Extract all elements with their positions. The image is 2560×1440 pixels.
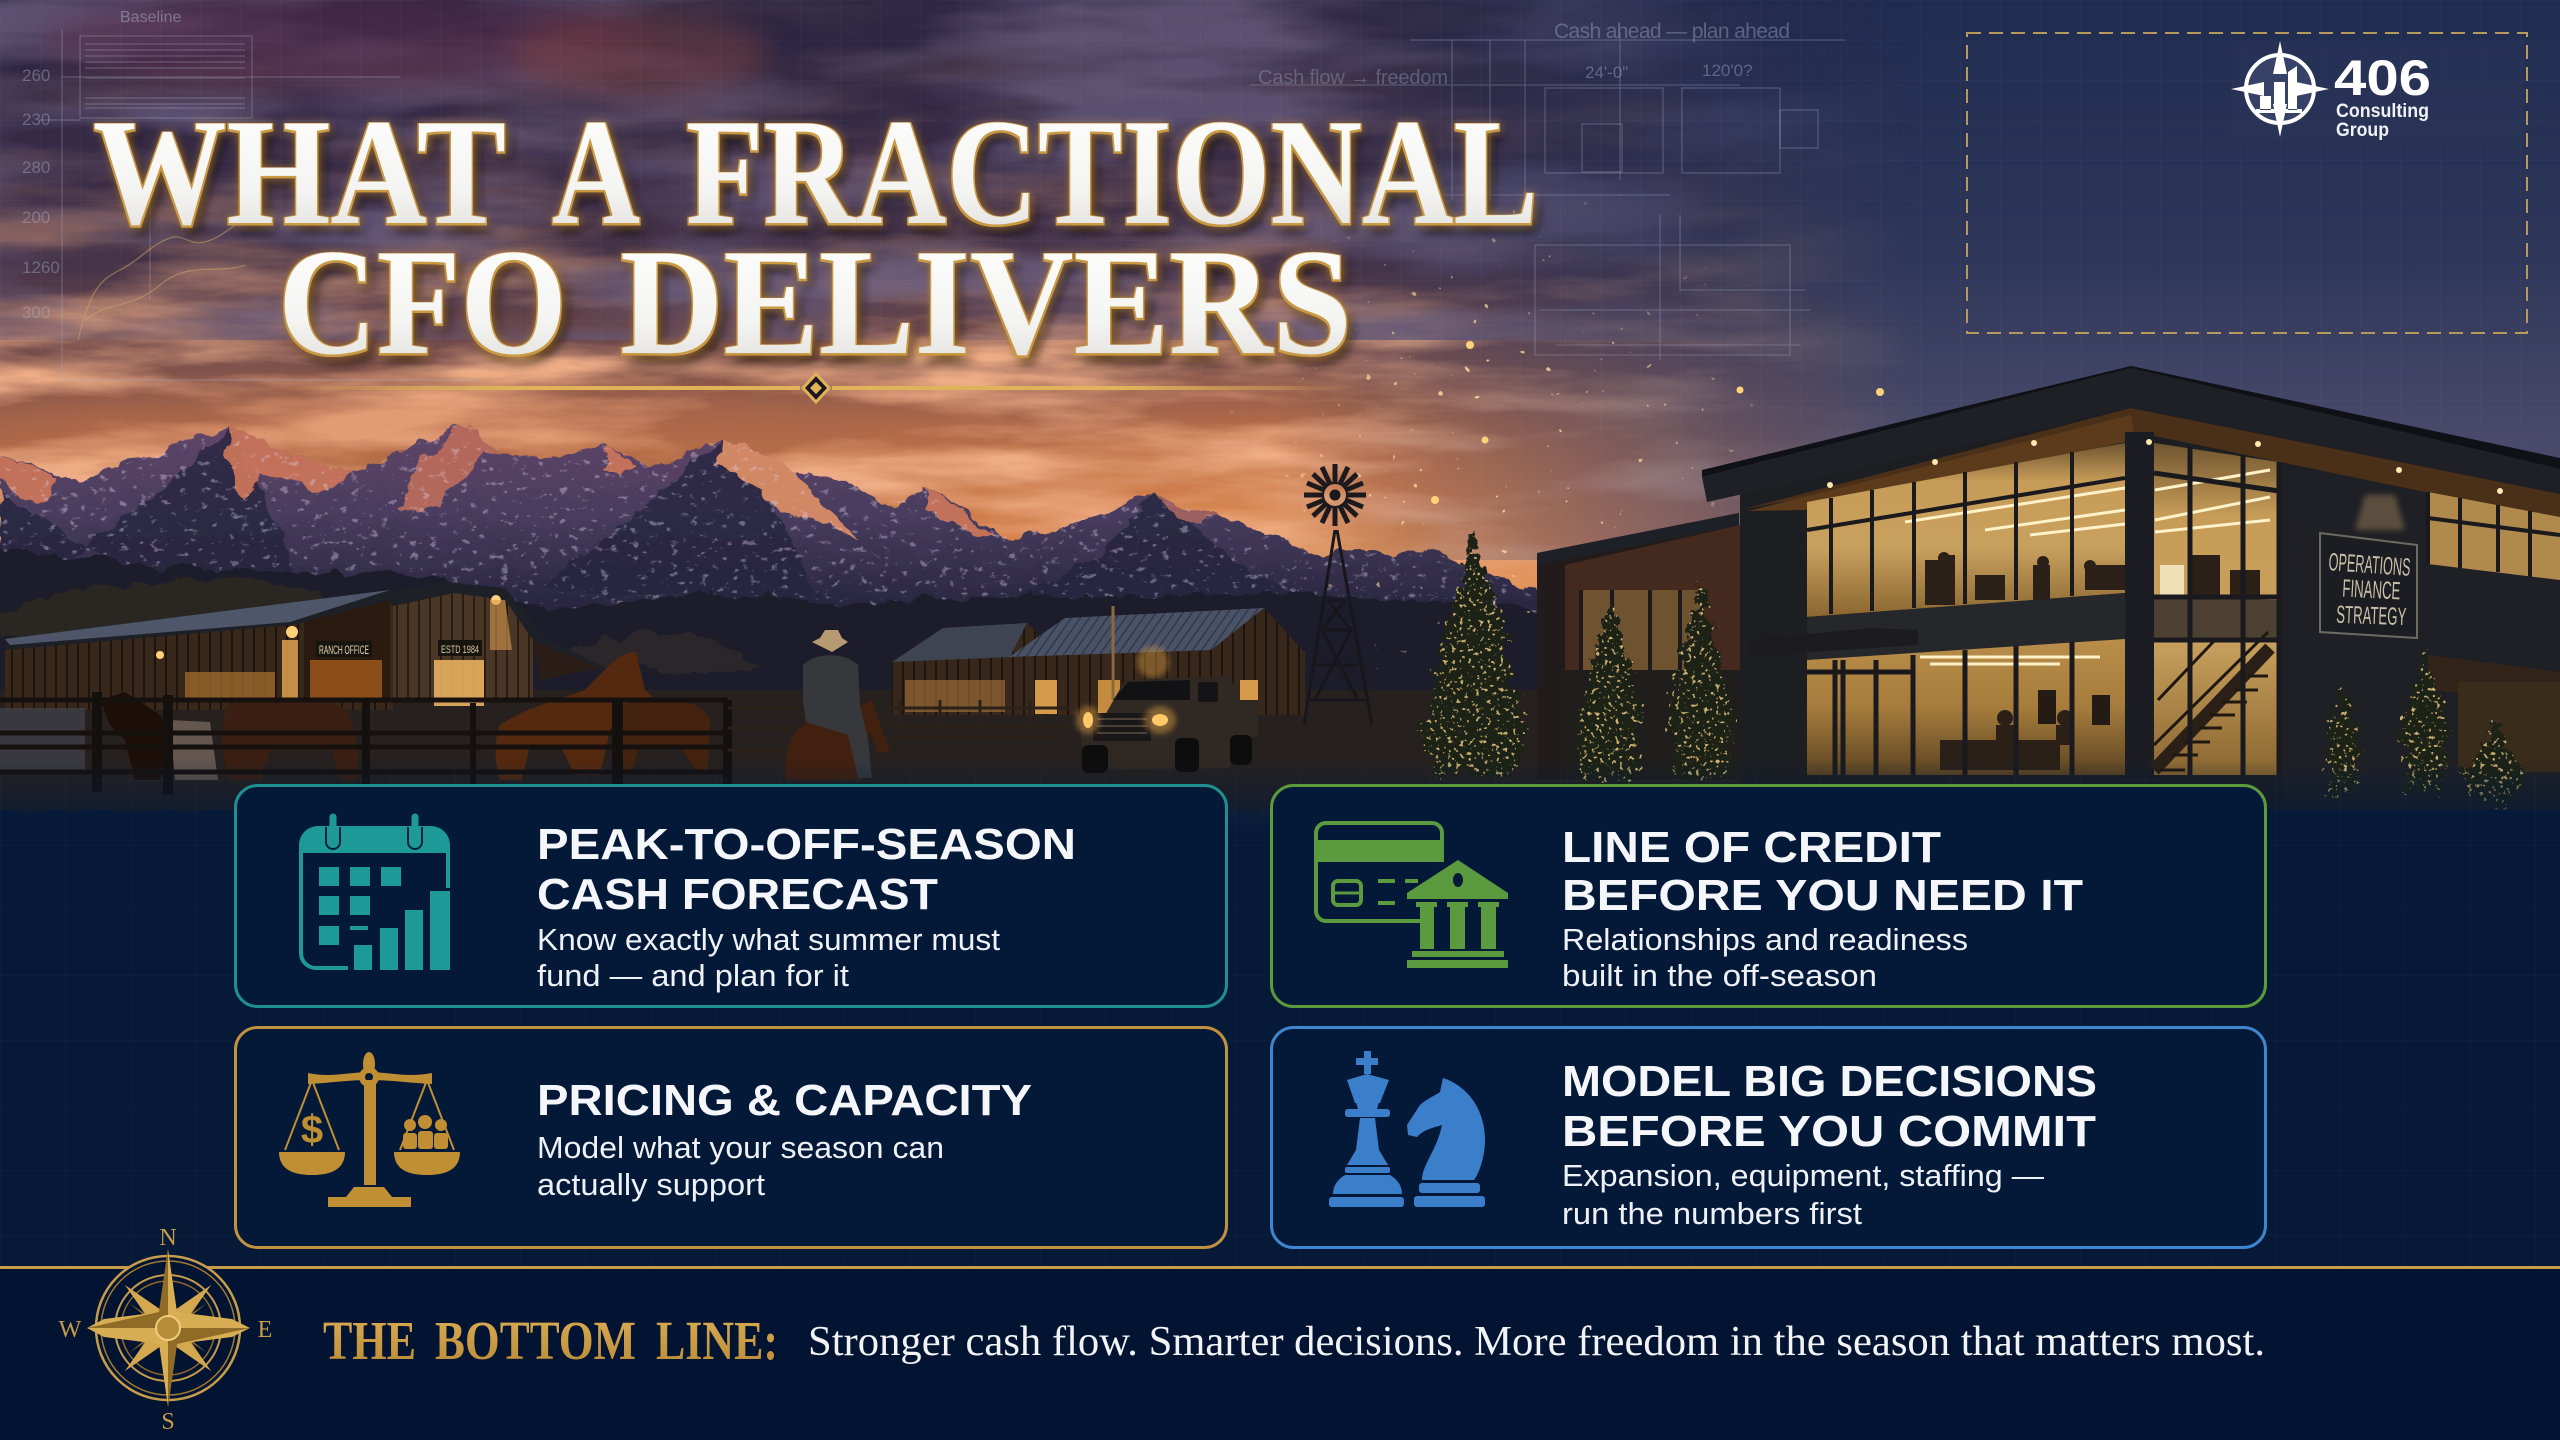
sign: ranch office <box>316 641 372 657</box>
blueprint sketch: top left chart: Baseline <box>120 9 181 26</box>
title: FRACTIONAL <box>686 88 1538 256</box>
blueprint sketch: top centre floor plan: 24'-0" <box>1585 63 1628 82</box>
icon: chess pieces <box>1329 1051 1485 1207</box>
bottom line label: BOTTOM <box>435 1310 636 1371</box>
card: line of credit: BEFORE YOU NEED IT <box>1562 871 2083 920</box>
rider on horse <box>785 630 890 780</box>
horses and fence <box>0 652 1070 795</box>
lower panel background <box>0 760 2560 1268</box>
blueprint sketch: top left chart <box>22 9 480 380</box>
sign: barn second: ESTD 1984 <box>441 644 479 656</box>
light strips <box>1905 488 2125 535</box>
foothills <box>0 545 1560 810</box>
mountains <box>0 424 1537 613</box>
description: run the numbers first <box>1562 1196 1862 1231</box>
wall uplight <box>2355 495 2405 530</box>
mullions <box>1807 452 2125 614</box>
column <box>2125 432 2154 778</box>
bottom line statement: Stronger cash flow. Smarter decisions. More freedom in the season that matters most. <box>808 1319 2265 1365</box>
logo: 406 Consulting Group: Consulting <box>2336 101 2429 122</box>
heading: PEAK-TO-OFF-SEASON <box>537 820 1076 869</box>
heading: MODEL BIG DECISIONS <box>1562 1057 2097 1106</box>
building: main structure <box>1702 366 2560 810</box>
blueprint sketch: top left chart: 300 <box>22 303 50 322</box>
card: model big decisions <box>1272 1028 2266 1248</box>
logo: 406 Consulting Group: 406 <box>2334 50 2431 106</box>
blueprint sketch: top left chart: 280 <box>22 158 50 177</box>
blueprint sketch: top left chart: 230 <box>22 110 50 129</box>
trees <box>1420 530 2530 805</box>
description: built in the off-season <box>1562 958 1877 993</box>
icon: compass: N <box>159 1225 177 1251</box>
description <box>1562 922 1968 993</box>
office silhouettes <box>1925 552 2125 605</box>
barn: background right <box>892 606 1305 715</box>
icon: scales <box>279 1052 460 1207</box>
title divider <box>270 374 1360 402</box>
logo: 406 Consulting Group: Group <box>2336 120 2389 141</box>
card: model big decisions: BEFORE YOU COMMIT <box>1562 1107 2096 1156</box>
barn: ranch office <box>5 583 605 710</box>
blueprint sketch: top left chart: 200 <box>22 208 50 227</box>
glass: upper <box>1807 443 2125 617</box>
building sign: FINANCE <box>2342 575 2401 606</box>
windmill <box>1304 464 1372 725</box>
title <box>93 88 1538 386</box>
building sign: OPERATIONS <box>2328 548 2411 582</box>
bottom line label: LINE: <box>656 1310 778 1371</box>
icon: credit card and bank <box>1316 823 1508 968</box>
title: A <box>552 88 640 256</box>
bottom line label <box>323 1310 778 1371</box>
card: cash forecast <box>236 786 1226 1006</box>
card: line of credit <box>1272 786 2266 1006</box>
blueprint sketch: top centre floor plan: 120'0? <box>1702 61 1753 80</box>
glass: lower <box>1807 639 2125 775</box>
icon: scales: $ <box>301 1108 323 1152</box>
card: pricing and capacity <box>236 1028 1226 1248</box>
background: sky <box>0 0 2560 840</box>
glass: right <box>2154 443 2279 775</box>
blueprint sketch: top left chart: 1260 <box>22 258 60 277</box>
description <box>537 1130 944 1202</box>
description: fund — and plan for it <box>537 958 849 993</box>
mountain shadow faces <box>0 426 1300 600</box>
spandrel <box>1807 593 2125 660</box>
bottom line label: THE <box>323 1310 416 1371</box>
description: Know exactly what summer must <box>537 922 1000 957</box>
description <box>537 922 1000 993</box>
heading: PRICING & CAPACITY <box>537 1076 1032 1125</box>
blueprint sketch: top centre floor plan <box>1250 20 1845 360</box>
description: Expansion, equipment, staffing — <box>1562 1158 2044 1193</box>
title: WHAT <box>93 88 506 256</box>
sparkles <box>1228 174 1884 670</box>
canopy <box>1749 628 1918 656</box>
lit peaks <box>0 423 1224 540</box>
description <box>1562 1158 2044 1231</box>
building: left wing <box>1537 513 1740 780</box>
heading: LINE OF CREDIT <box>1562 823 1941 872</box>
staircase <box>2154 648 2270 770</box>
description: actually support <box>537 1167 765 1202</box>
blueprint sketch: top centre floor plan: Cash flow → freedom <box>1258 67 1448 89</box>
card: cash forecast: CASH FORECAST <box>537 870 938 919</box>
description: Model what your season can <box>537 1130 944 1165</box>
description: Relationships and readiness <box>1562 922 1968 957</box>
building sign <box>2320 533 2417 638</box>
logo: 406 Consulting Group <box>2231 41 2525 141</box>
meeting table <box>1940 710 2074 770</box>
footer band <box>0 1266 2560 1440</box>
icon: compass <box>59 1225 272 1435</box>
sign: ranch office: RANCH OFFICE <box>319 643 369 657</box>
icon: compass: S <box>161 1409 175 1435</box>
blueprint sketch: top centre floor plan: Cash ahead — plan ahead <box>1554 20 1790 43</box>
icon: calendar <box>299 817 450 970</box>
building sign: STRATEGY <box>2336 601 2407 631</box>
ground <box>0 690 1800 810</box>
title: DELIVERS <box>620 218 1352 386</box>
icon: compass: E <box>258 1317 272 1343</box>
truck <box>1076 676 1258 773</box>
title: CFO <box>278 218 567 386</box>
icon: compass: W <box>59 1317 82 1343</box>
sign: barn second <box>438 640 482 656</box>
right-side windows <box>2428 492 2560 580</box>
blueprint sketch: top left chart: 260 <box>22 66 50 85</box>
logo placeholder frame <box>1967 33 2527 333</box>
